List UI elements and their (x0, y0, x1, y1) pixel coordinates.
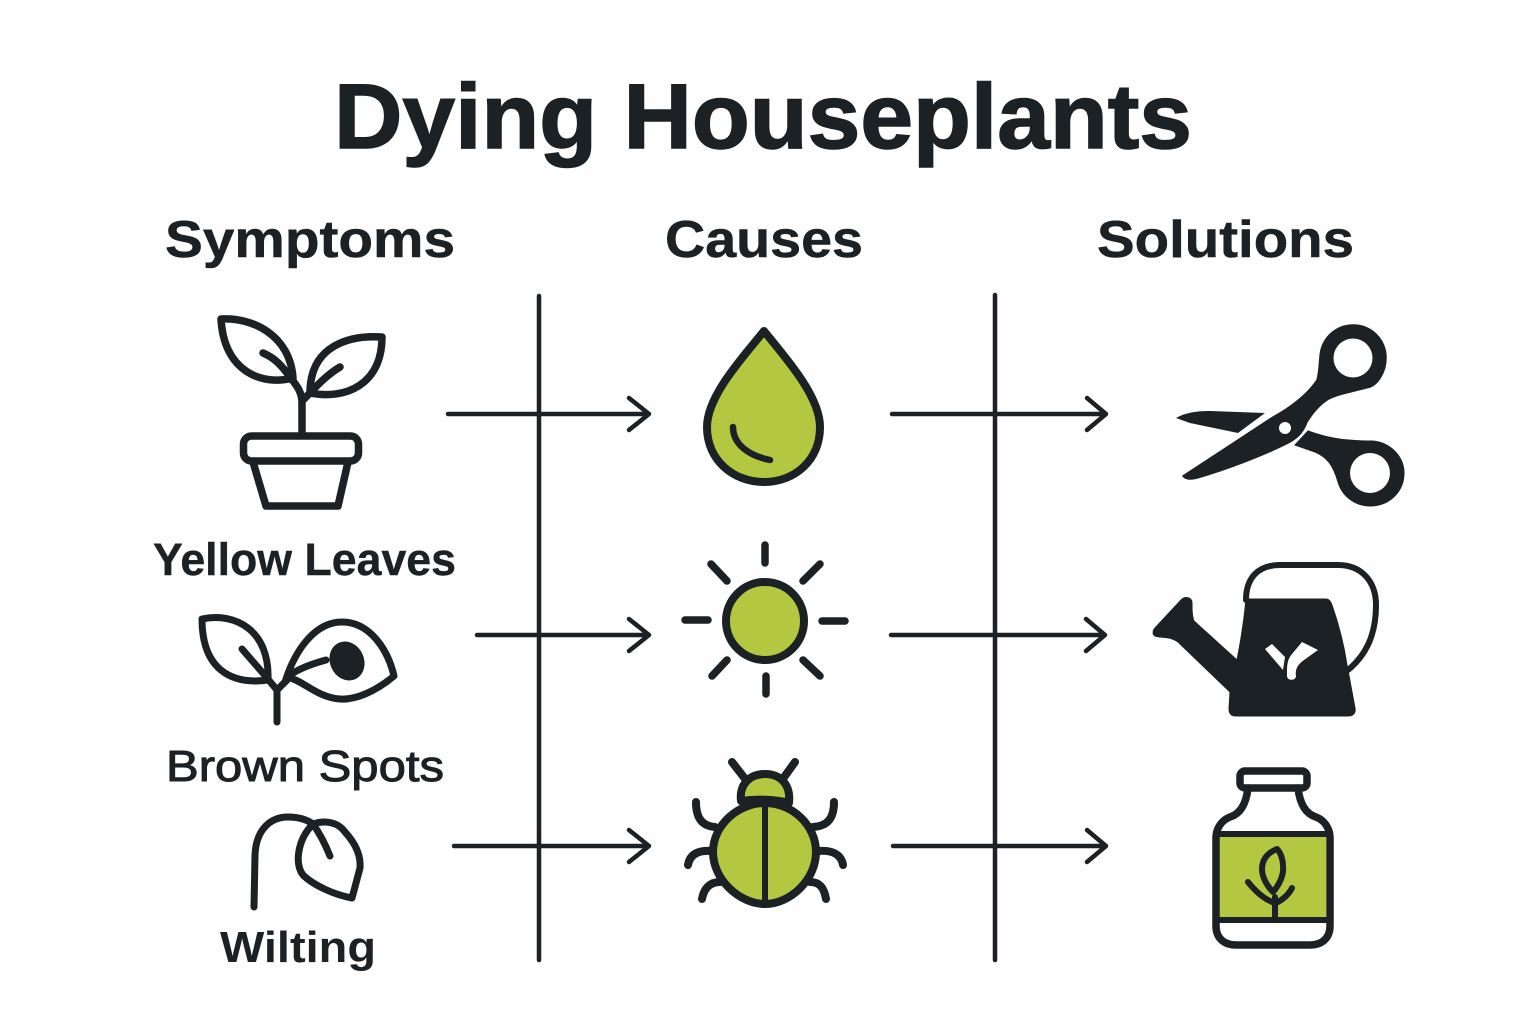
heading: causes: Causes (665, 211, 863, 269)
icon: wilting plant (254, 817, 360, 907)
vertical divider left (537, 296, 541, 960)
heading: solutions: Solutions (1097, 211, 1354, 269)
icon: fertilizer jar (1216, 771, 1330, 945)
arrow: brown spots to sun (477, 619, 649, 651)
icon: water drop (707, 331, 820, 482)
title: Dying Houseplants (334, 66, 1192, 168)
heading: symptoms: Symptoms (165, 211, 455, 269)
icon: potted plant (221, 319, 382, 506)
icon: sun (685, 545, 845, 694)
label: wilting: Wilting (220, 923, 376, 972)
vertical divider right (993, 295, 997, 960)
label: yellow leaves: Yellow Leaves (153, 534, 456, 585)
icon: leaf with brown spot (202, 618, 394, 722)
icon: scissors (1176, 325, 1404, 506)
icon: beetle (688, 762, 843, 904)
arrow: wilting to pests (454, 830, 649, 862)
arrow: pests to fertilizer (893, 830, 1106, 862)
arrow: yellow leaves to water (448, 398, 649, 430)
label: brown spots: Brown Spots (166, 742, 444, 791)
arrow: sun to watering (891, 619, 1105, 651)
icon: watering can (1153, 565, 1376, 716)
arrow: water to pruning (892, 398, 1106, 430)
